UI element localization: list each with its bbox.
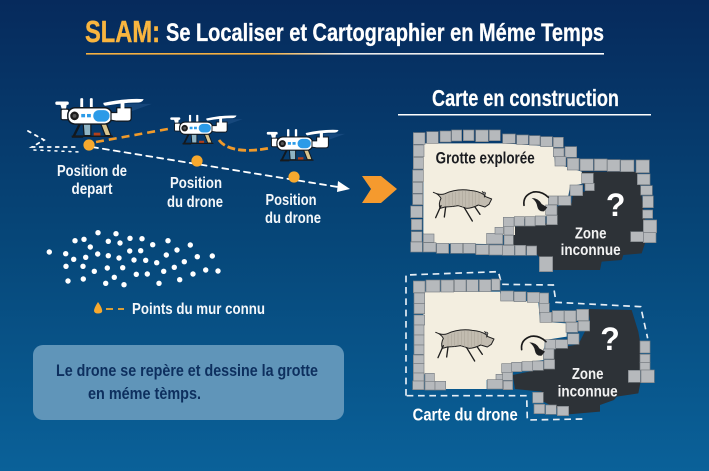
legend: points du mur connu: [94, 301, 265, 318]
drone flight trajectory: [28, 129, 350, 192]
text: zone inconnue: inconnue: [558, 384, 618, 401]
text: zone inconnue: [561, 225, 621, 259]
callout box: Le drone se repère et dessine la grotte: [56, 361, 318, 380]
title: [85, 14, 604, 55]
icon: boar painting: [436, 330, 494, 361]
text: zone inconnue: Zone: [572, 366, 604, 383]
label: position du drone 1: [167, 175, 223, 211]
text: zone inconnue: [558, 366, 618, 401]
label: position de depart: [57, 163, 127, 198]
big orange arrow: [362, 176, 397, 203]
callout box: [33, 345, 344, 420]
callout box: en méme tèmps.: [88, 384, 201, 403]
stone wall: [411, 130, 657, 272]
icon: boar painting: [433, 190, 492, 221]
label: position du drone 1: Position: [170, 175, 222, 192]
text: question mark: ?: [600, 321, 620, 357]
dark unknown zone: [513, 172, 645, 270]
heading: carte en construction: Carte en construction: [432, 85, 619, 111]
text: zone inconnue: inconnue: [561, 242, 621, 259]
label: position de depart: depart: [72, 181, 113, 198]
label: position du drone 1: du drone: [167, 194, 223, 211]
point cloud: [47, 230, 221, 287]
label: position du drone 2: [265, 192, 321, 227]
dashed white path: [28, 131, 338, 187]
stone wall: [413, 279, 654, 416]
icon: cave painting mark: [522, 336, 546, 356]
label: position de depart: Position de: [57, 163, 127, 180]
title: Se Localiser et Cartographier en Méme Temps: [166, 19, 604, 47]
dashed outline: [406, 272, 648, 420]
panel: grotte explorée: [411, 130, 657, 272]
drone 1: [55, 98, 152, 137]
legend: points du mur connu: Points du mur connu: [132, 301, 265, 318]
dark unknown zone: [513, 309, 641, 414]
text: grotte explorée: Grotte explorée: [436, 148, 535, 167]
text: carte du drone: Carte du drone: [413, 405, 518, 425]
cream explored floor: [423, 292, 567, 389]
panel: carte du drone: [406, 272, 654, 425]
orange dashes: [96, 129, 168, 142]
label: position du drone 2: du drone: [265, 210, 321, 227]
label: position du drone 2: Position: [266, 192, 316, 209]
text: zone inconnue: Zone: [575, 225, 607, 242]
icon: drop: [94, 302, 102, 314]
drone 3: [267, 129, 345, 161]
title: SLAM:: [85, 14, 160, 49]
arrow head small: [337, 181, 350, 192]
cream explored floor: [423, 143, 583, 244]
position markers: [83, 139, 300, 183]
text: question mark: ?: [606, 187, 625, 223]
icon: cave painting mark: [524, 192, 548, 211]
drone 2: [170, 115, 243, 144]
